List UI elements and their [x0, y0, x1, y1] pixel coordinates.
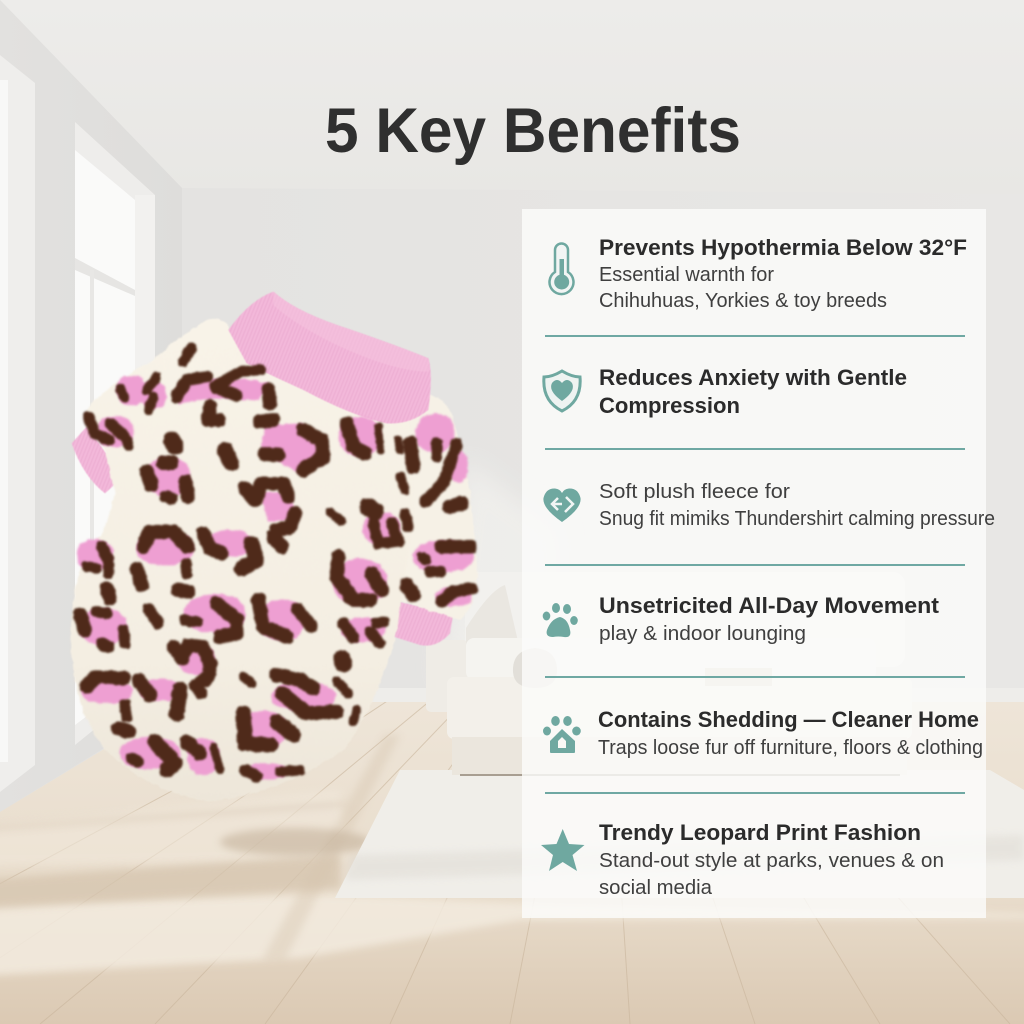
- rug shadow: [345, 835, 1024, 880]
- benefit 4: [543, 593, 940, 645]
- benefit 1: [550, 235, 967, 312]
- body: [71, 319, 413, 802]
- title: 5 Key Benefits: [325, 96, 741, 166]
- right cuff: [393, 602, 453, 646]
- icon: shield heart: [544, 371, 580, 411]
- dividers: [545, 336, 965, 793]
- wall sunlight: [440, 460, 560, 680]
- heading 1: Prevents Hypothermia Below 32°F: [599, 235, 967, 260]
- text 3: Snug fit mimiks Thundershirt calming pressure: [599, 508, 995, 530]
- text 1: Chihuhuas, Yorkies & toy breeds: [599, 290, 887, 312]
- right sleeve: [380, 393, 477, 620]
- icon: paw with house: [543, 716, 581, 753]
- sweater: [71, 292, 477, 802]
- text 4: play & indoor lounging: [599, 623, 806, 645]
- benefit 3: [543, 481, 995, 530]
- heading 2: [599, 365, 907, 418]
- floor sunlight: [0, 735, 1024, 978]
- icon: heart with arrows: [543, 488, 581, 522]
- left cuff: [72, 427, 123, 493]
- text 1: Essential warnth for: [599, 264, 774, 286]
- text 6: social media: [599, 877, 713, 899]
- collar: [228, 292, 431, 423]
- icon: paw: [543, 603, 578, 637]
- sofa: [426, 572, 912, 776]
- left windows: [0, 55, 155, 792]
- heading 2: Reduces Anxiety with Gentle: [599, 365, 907, 390]
- heading 5: Contains Shedding — Cleaner Home: [598, 707, 979, 732]
- floor shadows: [0, 855, 340, 912]
- text 6: Stand-out style at parks, venues & on: [599, 850, 944, 872]
- icon: star: [541, 829, 584, 871]
- text 1: [599, 264, 887, 312]
- heading 6: Trendy Leopard Print Fashion: [599, 820, 921, 845]
- benefits panel: [522, 209, 986, 918]
- floor planks: [0, 702, 1010, 1024]
- icon: thermometer: [550, 244, 574, 294]
- text 6: [599, 850, 944, 899]
- text 5: Traps loose fur off furniture, floors & clothing: [598, 737, 983, 759]
- rug: [335, 770, 1024, 898]
- benefit 2: [544, 365, 907, 418]
- benefit 6: [541, 820, 944, 899]
- benefit 5: [543, 707, 983, 759]
- text 3: [599, 481, 995, 530]
- collar rim: [273, 292, 429, 372]
- text 3: Soft plush fleece for: [599, 481, 790, 503]
- heading 4: Unsetricited All-Day Movement: [599, 593, 940, 618]
- heading 2: Compression: [599, 393, 740, 418]
- leopard pink patches: [79, 377, 472, 778]
- leopard brown spots: [80, 348, 472, 777]
